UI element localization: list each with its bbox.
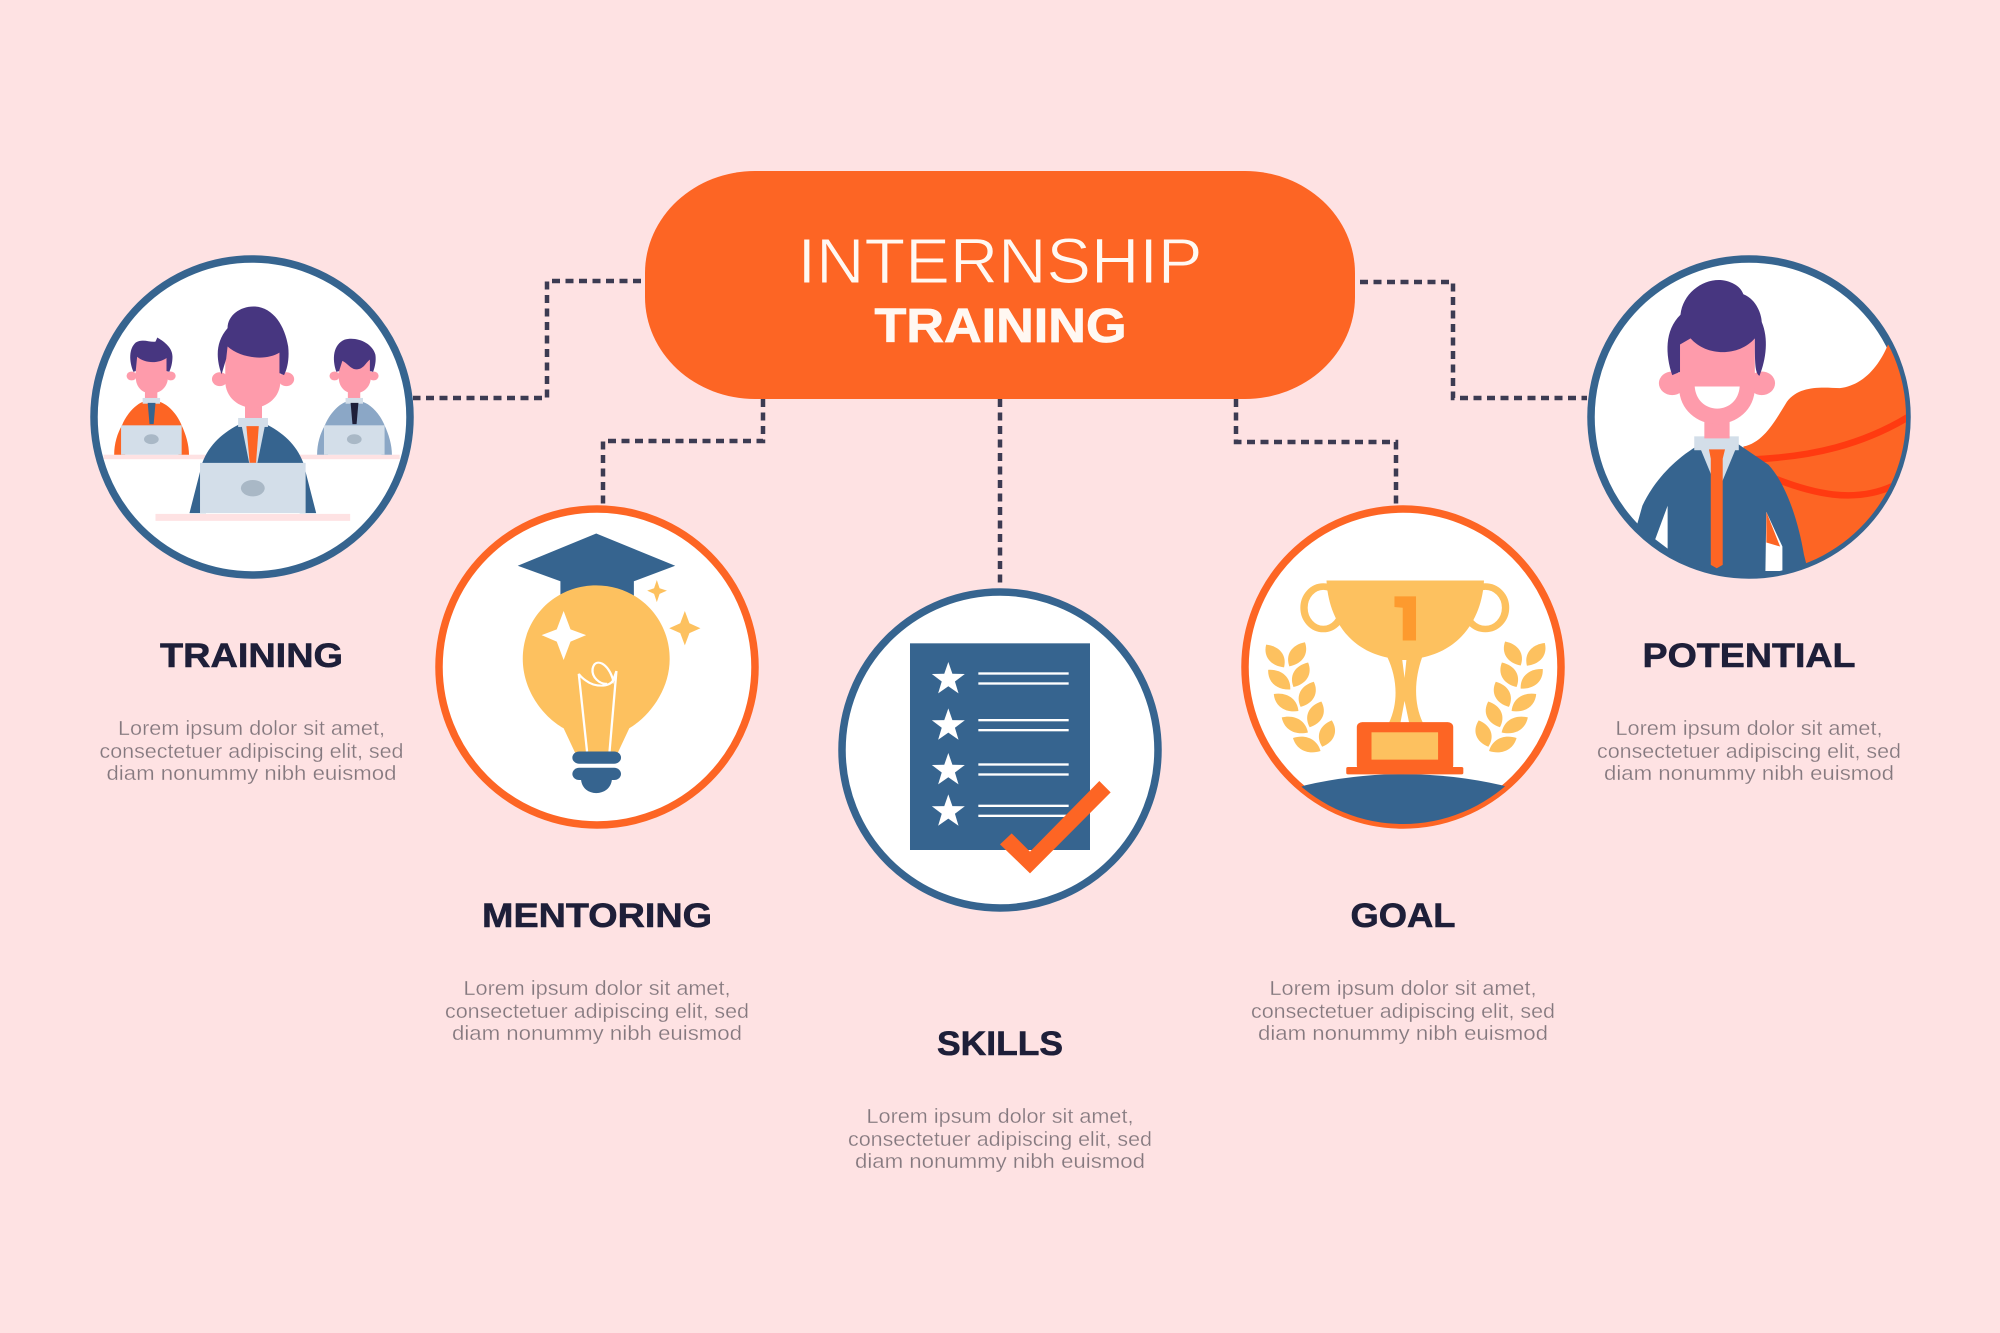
- body text: training: consectetuer adipiscing elit, sed: [100, 740, 404, 763]
- connector: header to goal: [1236, 399, 1396, 505]
- right trainee: [317, 339, 392, 455]
- heading: potential: POTENTIAL: [1642, 637, 1856, 675]
- infographic canvas: [90, 171, 1911, 1172]
- heading: training: TRAINING: [160, 637, 343, 675]
- left trainee: [114, 338, 189, 455]
- connector: header to mentoring: [603, 399, 763, 505]
- panel: training: [94, 259, 410, 785]
- connector: header to training: [413, 281, 641, 398]
- body text: goal: Lorem ipsum dolor sit amet,: [1270, 977, 1536, 1000]
- body text: skills: consectetuer adipiscing elit, sed: [848, 1128, 1152, 1151]
- icon: trophy with laurels: [1265, 580, 1546, 824]
- connector: header to skills: [998, 399, 1002, 588]
- circle: potential: [1591, 259, 1907, 575]
- circle: training: [94, 259, 410, 575]
- body text: potential: Lorem ipsum dolor sit amet,: [1616, 717, 1882, 740]
- body text: training: diam nonummy nibh euismod: [106, 762, 396, 785]
- body text: training: Lorem ipsum dolor sit amet,: [118, 717, 385, 740]
- body text: goal: diam nonummy nibh euismod: [1258, 1022, 1548, 1045]
- title line: training: TRAINING: [874, 300, 1126, 353]
- circle: goal: [1245, 509, 1561, 825]
- body text: training: [100, 717, 404, 785]
- body text: skills: Lorem ipsum dolor sit amet,: [866, 1105, 1134, 1128]
- body text: mentoring: Lorem ipsum dolor sit amet,: [464, 977, 730, 1000]
- centre trainee: [189, 306, 316, 513]
- connector: header to potential: [1360, 282, 1587, 398]
- body text: potential: diam nonummy nibh euismod: [1604, 762, 1894, 785]
- body text: mentoring: [445, 977, 749, 1045]
- body text: goal: consectetuer adipiscing elit, sed: [1251, 1000, 1555, 1023]
- heading: skills: SKILLS: [937, 1025, 1063, 1063]
- panel: mentoring: [439, 509, 755, 1045]
- body text: potential: [1597, 717, 1901, 785]
- circle: mentoring: [439, 509, 755, 825]
- heading: goal: GOAL: [1350, 897, 1456, 935]
- icon: light bulb with graduation cap: [518, 533, 700, 793]
- body text: mentoring: consectetuer adipiscing elit, sed: [445, 1000, 749, 1023]
- circle: skills: [842, 592, 1158, 908]
- panel: skills: [842, 592, 1158, 1173]
- icon: smiling businessperson with cape: [1637, 280, 1906, 572]
- body text: mentoring: diam nonummy nibh euismod: [452, 1022, 742, 1045]
- title line: internship: INTERNSHIP: [798, 225, 1202, 297]
- body text: skills: [848, 1105, 1152, 1173]
- icon: checklist with stars and check mark: [910, 643, 1111, 873]
- heading: mentoring: MENTORING: [482, 897, 712, 935]
- panel: potential: [1591, 259, 1936, 785]
- body text: skills: diam nonummy nibh euismod: [855, 1150, 1145, 1173]
- body text: potential: consectetuer adipiscing elit, sed: [1597, 740, 1901, 763]
- panel: goal: [1245, 509, 1561, 1045]
- title pill: [645, 171, 1355, 399]
- body text: goal: [1251, 977, 1555, 1045]
- icon: three trainees at laptops: [104, 306, 400, 521]
